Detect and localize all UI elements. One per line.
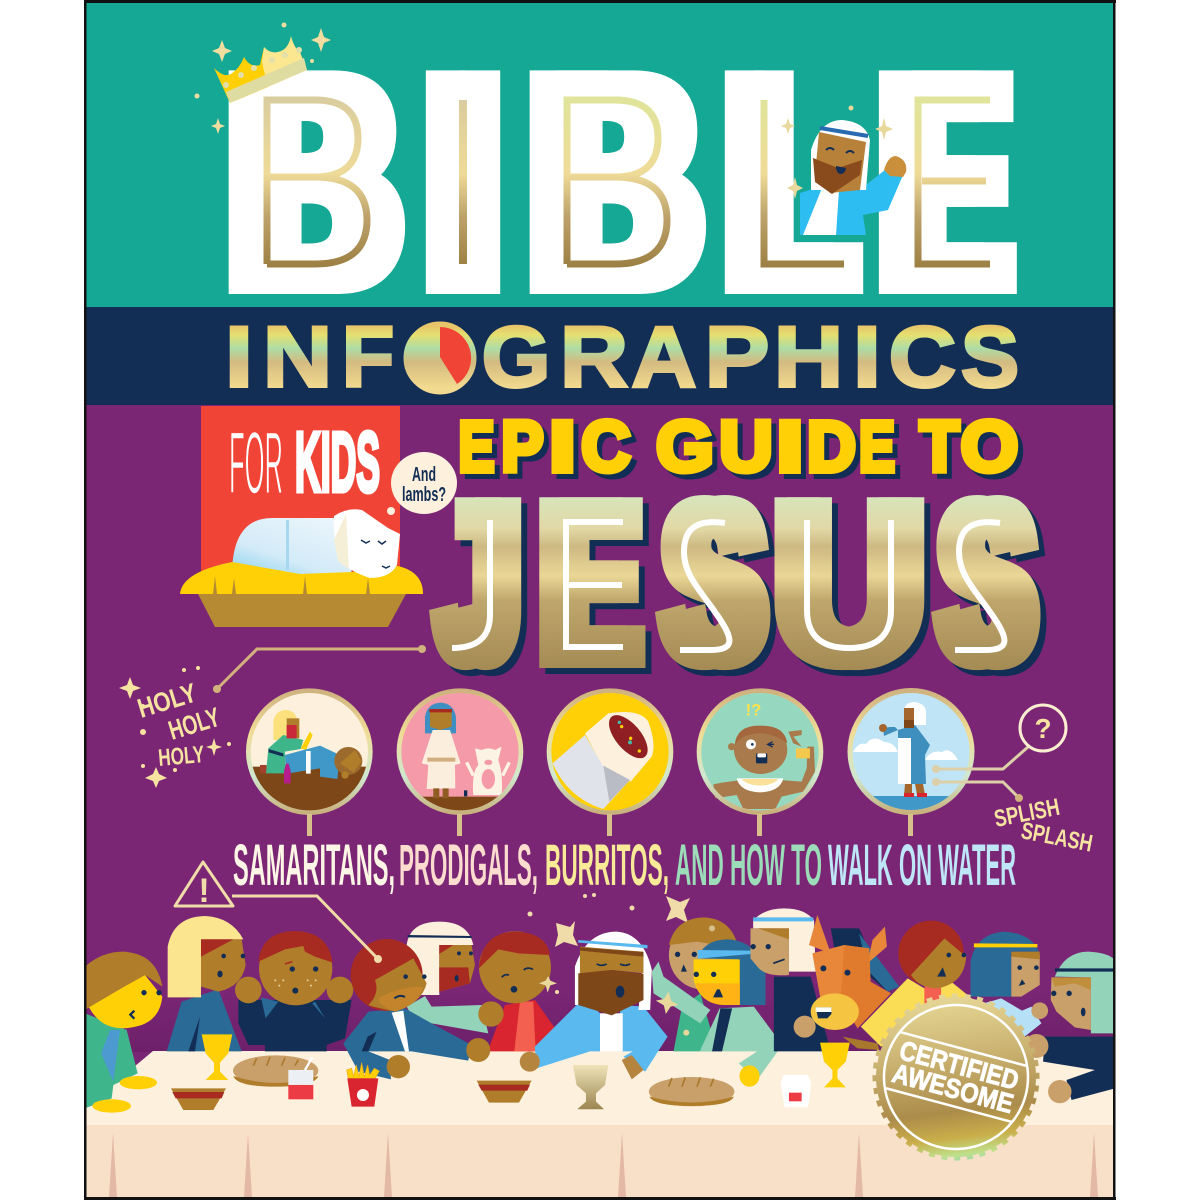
subtitle: INFOGRAPHICS: P [705, 310, 769, 405]
title: BIBLE: L [718, 15, 833, 348]
takeout box [781, 1075, 811, 1107]
text: SPLISH SPLASH: SPLISH [992, 794, 1062, 833]
heading: EPIC GUIDE TO: T [920, 408, 959, 487]
decorative stars above the table [528, 893, 690, 994]
subtitle: samaritans, prodigals, burritos and how to walk on water: AND HOW TO [675, 833, 822, 898]
text: HOLY HOLY HOLY: HOLY [157, 741, 205, 772]
subtitle: INFOGRAPHICS: C [889, 310, 956, 406]
disciple: frowning red hair in blue coat [343, 939, 490, 1079]
title: BIBLE: B [522, 15, 682, 348]
disciple: yellow face in blue hood [694, 939, 782, 1087]
heading: EPIC GUIDE TO: C [581, 407, 631, 486]
subtitle: samaritans, prodigals, burritos and how to walk on water: SAMARITANS, [233, 833, 395, 898]
heading: EPIC GUIDE TO: I [549, 407, 576, 486]
disciple: blue hood with yellow headband [971, 932, 1048, 1037]
disciples left half of table [85, 916, 561, 1113]
badge: certified awesome seal: CERTIFIED [896, 1035, 1022, 1096]
heading: EPIC GUIDE TO: D [807, 406, 856, 486]
bread loaf [233, 1055, 318, 1087]
subtitle: INFOGRAPHICS: A [631, 308, 697, 405]
text: SPLISH SPLASH [992, 794, 1095, 858]
subtitle: INFOGRAPHICS: G [482, 310, 550, 405]
heading: JESUS [433, 458, 1020, 707]
title: BIBLE: B [221, 15, 381, 348]
disciple: blonde hair [167, 916, 246, 1051]
text: SPLISH SPLASH: SPLASH [1019, 817, 1095, 858]
heading: JESUS: E [536, 458, 625, 706]
disciple: red shirt [479, 931, 561, 1051]
subtitle: samaritans, prodigals, burritos and how to walk on water: PRODIGALS, [399, 833, 538, 898]
gold goblet [820, 1043, 850, 1087]
character: waving man in BIBLE title [781, 106, 906, 235]
heading: EPIC GUIDE TO: I [777, 407, 803, 486]
disciple: cream headdress in navy [750, 908, 831, 1051]
heading: JESUS: J [433, 460, 505, 707]
heading: EPIC GUIDE TO: E [859, 408, 895, 487]
icon: manger [180, 562, 423, 627]
text: HOLY HOLY HOLY: HOLY [165, 702, 223, 746]
badge: certified awesome seal [858, 979, 1054, 1175]
connector from JESUS to HOLY [213, 645, 426, 693]
soup bowl [477, 1081, 532, 1103]
subtitle: INFOGRAPHICS: R [560, 309, 628, 406]
Jesus in white headdress [520, 932, 668, 1079]
circle stems [307, 814, 913, 836]
heading: EPIC GUIDE TO: O [961, 407, 1018, 487]
gold goblet [202, 1034, 232, 1080]
circle 5: Jesus walking on water [850, 690, 972, 818]
disciple: yellow face at far left [85, 952, 162, 1113]
subtitle: samaritans, prodigals, burritos and how to walk on water: BURRITOS, [545, 833, 669, 898]
icon: warning triangle with connector: ! [198, 872, 210, 910]
fries box [347, 1063, 379, 1107]
heading: EPIC GUIDE TO: G [656, 407, 714, 487]
silver chalice [573, 1065, 608, 1109]
heading: EPIC GUIDE TO: P [501, 408, 544, 487]
disciple: tan boy with raised arm [652, 917, 738, 1051]
text: HOLY HOLY HOLY [119, 666, 231, 788]
circle 1: good samaritan scene [247, 691, 372, 817]
heading: EPIC GUIDE TO [459, 406, 1018, 487]
icon: crown [194, 22, 331, 134]
soup bowl [171, 1088, 226, 1110]
callout: And lambs? thought bubble [387, 452, 457, 515]
circle 3: burrito [549, 691, 671, 813]
subtitle: INFOGRAPHICS: I [225, 310, 253, 406]
icon: lamb head [334, 509, 400, 578]
text: FOR KIDS: FOR [229, 413, 283, 512]
circle 2: prodigal son with pig [397, 691, 523, 817]
subtitle: INFOGRAPHICS: N [263, 309, 332, 405]
icon: lamb body [232, 518, 352, 575]
callout: question mark with connectors: ? [1034, 713, 1052, 744]
disciple: red hair in yellow [842, 921, 978, 1050]
badge: certified awesome seal: AWESOME [889, 1058, 1017, 1119]
panel: for kids label with lamb in manger: KIDS [295, 415, 380, 509]
circle 4: surprised baby pointing at eye [699, 691, 821, 813]
bread loaf [649, 1077, 734, 1106]
callout: And lambs? thought bubble: lambs? [402, 484, 446, 506]
heading: JESUS: S [934, 458, 1020, 707]
title: BIBLE [221, 15, 985, 349]
gold inline decoration in BIBLE [267, 100, 990, 264]
subtitle: samaritans, prodigals, burritos and how to walk on water [233, 833, 1016, 898]
heading: JESUS: U [771, 458, 916, 706]
icon: pie chart letter O [405, 323, 475, 393]
icon: warning triangle with connector [175, 862, 382, 963]
disciple: mint hood in navy [1024, 952, 1115, 1103]
heading: EPIC GUIDE TO: E [459, 408, 494, 487]
heading: EPIC GUIDE TO: U [719, 407, 773, 487]
subtitle: INFOGRAPHICS: F [342, 310, 394, 406]
subtitle: INFOGRAPHICS: H [774, 309, 843, 405]
heading: JESUS: S [658, 459, 750, 707]
callout: And lambs? thought bubble: And [412, 464, 436, 486]
circle 4: surprised baby pointing at eye: !? [746, 701, 761, 720]
disciples right half of table [520, 908, 1115, 1109]
panel: for kids label with lamb in manger [180, 406, 457, 627]
title: BIBLE: I [419, 17, 472, 349]
subtitle: INFOGRAPHICS: I [853, 310, 881, 406]
subtitle: INFOGRAPHICS [225, 308, 1019, 406]
subtitle: INFOGRAPHICS: S [961, 309, 1019, 405]
callout: question mark with connectors [932, 705, 1066, 802]
disciple: hands raised in navy shirt [235, 931, 353, 1051]
title: BIBLE: E [873, 16, 985, 349]
milk carton [288, 1057, 313, 1099]
donkey [794, 915, 899, 1038]
disciple: white headdress with red beard [407, 922, 504, 1033]
table with tablecloth [85, 1051, 1115, 1200]
text: HOLY HOLY HOLY: HOLY [134, 678, 200, 724]
